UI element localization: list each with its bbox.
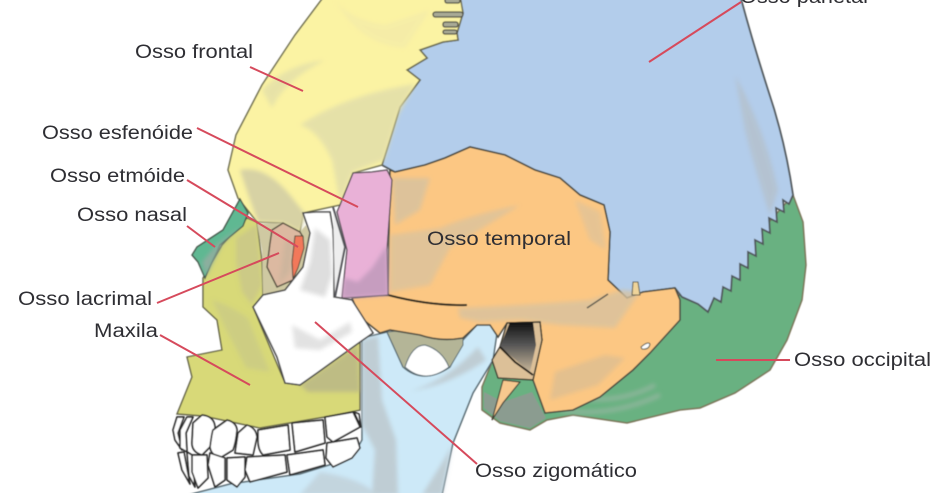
frontal bone — [228, 0, 463, 232]
mandibular notch — [387, 330, 463, 376]
nasal bone — [192, 199, 248, 278]
line: occipital — [716, 359, 790, 361]
line: ethmoid — [187, 180, 298, 247]
line: lacrimal — [157, 253, 279, 303]
label: Osso temporal: Osso temporal — [427, 229, 571, 250]
line: frontal — [250, 67, 303, 91]
temporal bone — [342, 147, 680, 413]
mandible — [188, 325, 497, 493]
orbit shading — [257, 223, 310, 295]
line: zygomatic — [315, 322, 477, 464]
skull illustration — [173, 0, 806, 493]
line: parietal — [649, 2, 741, 62]
label: Osso frontal: Osso frontal — [135, 42, 253, 63]
line: sphenoid — [197, 128, 358, 207]
tympanic and styloid region — [492, 322, 542, 420]
suture interlocks — [433, 0, 463, 34]
label: Osso nasal: Osso nasal — [77, 205, 187, 226]
lower teeth — [178, 438, 360, 488]
label: Osso zigomático: Osso zigomático — [475, 461, 637, 482]
label: Osso etmóide: Osso etmóide — [50, 166, 185, 187]
label: Osso esfenóide: Osso esfenóide — [42, 123, 193, 144]
ethmoid bone — [292, 236, 304, 279]
line: maxilla — [160, 335, 250, 385]
label: Maxila: Maxila — [94, 321, 159, 342]
zygomatic bone — [253, 207, 373, 385]
maxilla — [177, 218, 360, 428]
label: Osso lacrimal: Osso lacrimal — [18, 289, 152, 310]
parietal bone — [382, 0, 793, 312]
label: Osso occipital: Osso occipital — [794, 350, 931, 371]
lacrimal bone — [267, 223, 303, 287]
sphenoid bone — [337, 170, 392, 298]
line: nasal — [187, 226, 215, 247]
upper teeth — [173, 412, 361, 458]
occipital bone — [482, 195, 806, 430]
